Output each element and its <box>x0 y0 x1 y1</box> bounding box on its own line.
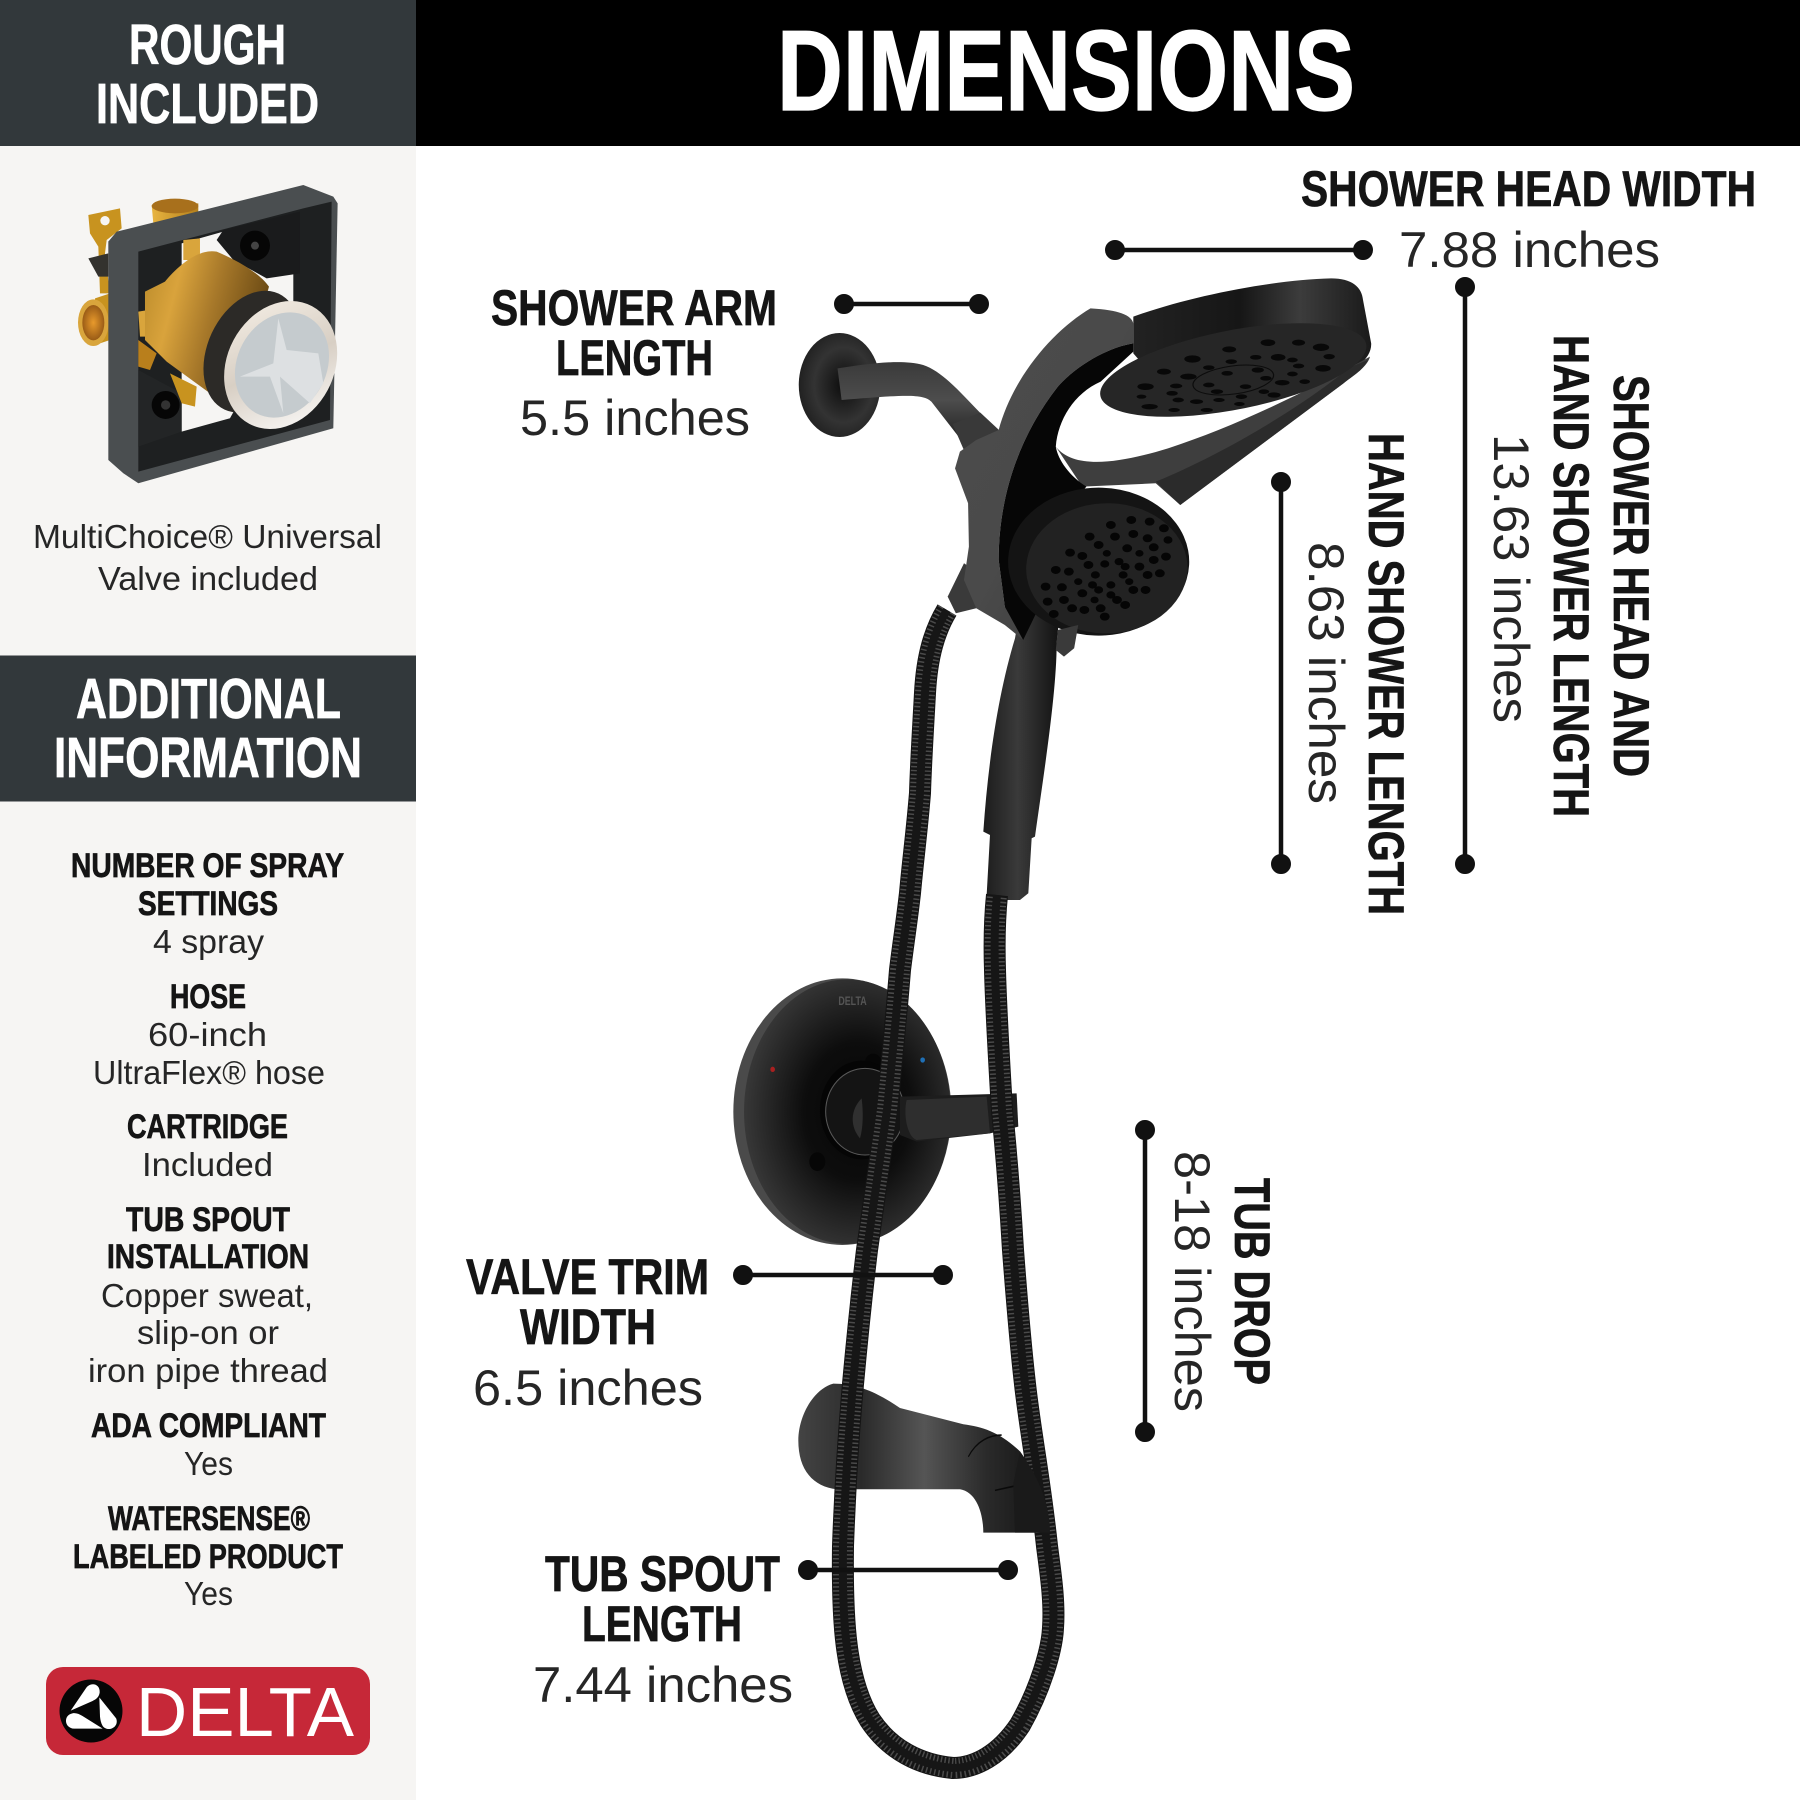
spec: tub spout installation: TUB SPOUT <box>126 1201 290 1239</box>
spec: number of spray settings: 4 spray <box>153 923 265 960</box>
spec: ada compliant <box>91 1407 326 1482</box>
label: hand shower length <box>1298 433 1414 915</box>
label: shower arm length: SHOWER ARM <box>491 280 777 336</box>
caption: valve: MultiChoice® Universal <box>33 518 382 555</box>
spec: hose <box>93 978 325 1091</box>
product: tub spout <box>798 1384 1050 1533</box>
dimension line: hand shower length <box>1272 472 1290 874</box>
logo: delta: DELTA <box>136 1673 354 1751</box>
spec: watersense: Yes <box>184 1575 233 1612</box>
spec: hose: UltraFlex® hose <box>93 1054 325 1091</box>
spec: cartridge <box>127 1108 288 1183</box>
mount bracket <box>955 308 1133 640</box>
panel: additional information heading: INFORMATION <box>54 726 362 790</box>
product: valve trim plate and lever <box>733 978 1018 1245</box>
spec: tub spout installation: slip-on or <box>137 1314 279 1351</box>
title: dimensions: DIMENSIONS <box>777 8 1355 135</box>
dimension line: shower head width <box>1106 240 1372 260</box>
top head spray face <box>1089 305 1378 435</box>
spec: ada compliant: ADA COMPLIANT <box>91 1407 326 1445</box>
spec: hose: 60-inch <box>148 1016 267 1053</box>
label: shower head and hand shower length: HAND SHOWER LENGTH <box>1543 335 1599 817</box>
label: hand shower length: 8.63 inches <box>1298 542 1354 804</box>
spec: ada compliant: Yes <box>184 1445 233 1482</box>
label: shower arm length <box>491 280 777 446</box>
label: shower head width <box>1301 161 1756 278</box>
label: shower arm length: 5.5 inches <box>520 390 750 446</box>
panel: rough included heading <box>0 0 416 146</box>
label: valve trim width: 6.5 inches <box>473 1360 703 1416</box>
lower support arm <box>1056 357 1370 505</box>
panel: left sidebar background <box>0 0 416 1800</box>
dimension line: valve trim <box>734 1266 952 1284</box>
panel: rough included heading: ROUGH <box>129 13 286 77</box>
caption: valve <box>33 518 382 597</box>
top head back rim <box>1133 278 1371 393</box>
dimension line: head and hand length <box>1456 278 1474 874</box>
product: spout tip over hose <box>1013 1451 1050 1533</box>
panel: rough included heading: INCLUDED <box>96 72 319 136</box>
spray selector toggle <box>1056 625 1078 657</box>
spec: number of spray settings <box>71 847 344 960</box>
label: tub spout length: LENGTH <box>582 1596 742 1652</box>
dimension line: tub drop <box>1136 1120 1154 1442</box>
panel: black title band <box>416 0 1800 146</box>
label: hand shower length: HAND SHOWER LENGTH <box>1358 433 1414 915</box>
spec: watersense <box>73 1500 343 1612</box>
spec: hose: HOSE <box>170 978 246 1016</box>
spec: tub spout installation: iron pipe thread <box>88 1352 328 1389</box>
spec: tub spout installation: Copper sweat, <box>101 1277 313 1314</box>
spec: watersense: LABELED PRODUCT <box>73 1538 343 1576</box>
label: shower head and hand shower length: 13.63 inches <box>1483 434 1539 723</box>
panel: additional information heading <box>0 656 416 802</box>
arm ball joint <box>953 413 1001 455</box>
dimension line: shower arm <box>834 294 988 314</box>
product: flexible hose loop <box>843 610 1053 1768</box>
label: tub drop: 8-18 inches <box>1164 1151 1220 1412</box>
bracket hose stem <box>948 563 988 613</box>
logo: delta <box>46 1667 370 1755</box>
label: shower head width: 7.88 inches <box>1399 222 1660 278</box>
caption: valve: Valve included <box>98 560 318 597</box>
spec: tub spout installation: INSTALLATION <box>107 1238 309 1276</box>
hand shower head body <box>983 467 1215 656</box>
wall flange <box>799 333 880 437</box>
image: rough-in valve <box>78 185 359 483</box>
label: shower arm length: LENGTH <box>556 330 713 386</box>
label: tub spout length: TUB SPOUT <box>545 1546 780 1602</box>
spec: number of spray settings: SETTINGS <box>138 885 278 923</box>
spec: number of spray settings: NUMBER OF SPRAY <box>71 847 344 885</box>
spec: cartridge: Included <box>142 1146 273 1183</box>
label: valve trim width: WIDTH <box>520 1299 656 1355</box>
dark bracket inner band <box>999 343 1133 640</box>
panel: additional information heading: ADDITIONAL <box>76 667 341 731</box>
label: tub spout length: 7.44 inches <box>533 1657 793 1713</box>
label: valve trim width <box>466 1249 709 1416</box>
label: shower head and hand shower length <box>1483 335 1659 817</box>
label: tub drop: TUB DROP <box>1224 1178 1280 1385</box>
spec: tub spout installation <box>88 1201 328 1389</box>
spec: watersense: WATERSENSE® <box>108 1500 310 1538</box>
product: hand shower handle <box>983 610 1060 900</box>
label: tub spout length <box>533 1546 793 1713</box>
shower arm pipe <box>838 362 982 438</box>
spec: cartridge: CARTRIDGE <box>127 1108 288 1146</box>
product: wall shower arm and dual shower head <box>799 278 1378 657</box>
product: valve trim plate and lever: DELTA <box>838 994 867 1008</box>
label: tub drop <box>1164 1151 1280 1412</box>
label: valve trim width: VALVE TRIM <box>466 1249 709 1305</box>
label: shower head and hand shower length: SHOWER HEAD AND <box>1603 375 1659 777</box>
dimension line: tub spout <box>798 1560 1018 1580</box>
